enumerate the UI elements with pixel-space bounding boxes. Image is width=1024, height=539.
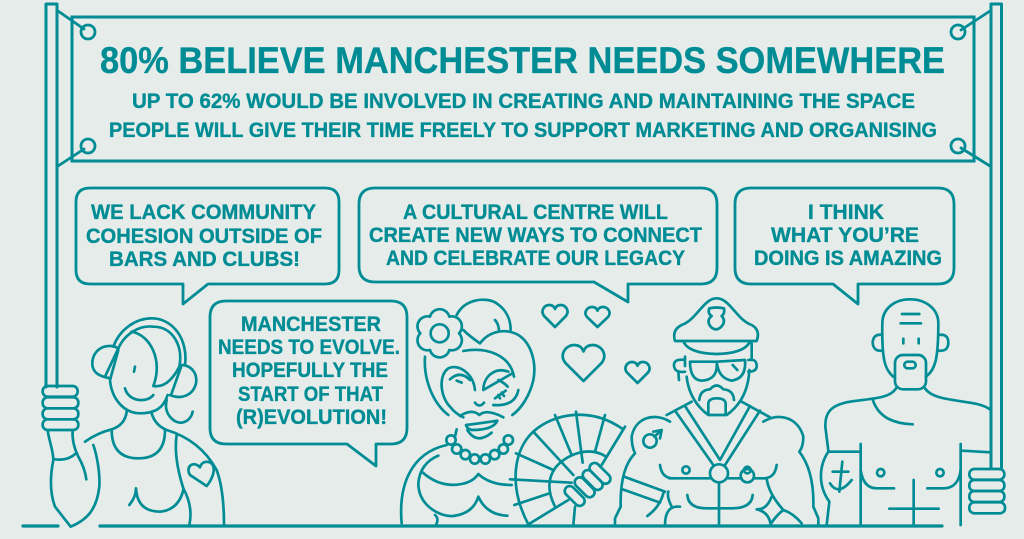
speech bubble: amazing: I THINK [808, 201, 884, 224]
speech bubble: evolve: START OF THAT [238, 383, 383, 406]
speech bubble: evolve: HOPEFULLY THE [232, 359, 388, 382]
left banner pole [46, 4, 57, 387]
banner line one: UP TO 62% WOULD BE INVOLVED IN CREATING AND MAINTAINING THE SPACE [132, 90, 915, 113]
right banner pole [991, 4, 1002, 468]
icon: floating hearts [542, 305, 650, 383]
speech bubble: cultural centre: CREATE NEW WAYS TO CONNECT [369, 224, 702, 247]
speech bubble: cultural centre [359, 188, 717, 302]
speech bubble: amazing: DOING IS AMAZING [754, 247, 942, 270]
speech bubble: evolve: NEEDS TO EVOLVE. [218, 336, 400, 359]
speech bubble: evolve: MANCHESTER [241, 313, 381, 336]
speech bubble: evolve [210, 301, 407, 466]
ground line [23, 524, 942, 528]
fan [510, 412, 625, 525]
banner fixings [58, 11, 990, 166]
banner [58, 11, 990, 166]
speech bubble: community cohesion: COHESION OUTSIDE OF [86, 225, 322, 248]
speech bubble: cultural centre: AND CELEBRATE OUR LEGACY [386, 247, 685, 270]
figure: drag queen with fan [401, 300, 625, 525]
banner frame [72, 17, 974, 161]
icon: anchor tattoo [830, 462, 852, 492]
banner line two: PEOPLE WILL GIVE THEIR TIME FREELY TO SUPPORT MARKETING AND ORGANISING [109, 119, 937, 142]
speech bubble: cultural centre: A CULTURAL CENTRE WILL [403, 201, 668, 224]
speech bubble: evolve: (R)EVOLUTION! [236, 406, 387, 429]
figure: woman with headphones [43, 318, 224, 527]
banner headline: 80% BELIEVE MANCHESTER NEEDS SOMEWHERE [100, 40, 945, 81]
figure: leather cap man [615, 298, 818, 525]
figure: bald man with anchor tattoo [821, 299, 1005, 525]
speech bubble: community cohesion: BARS AND CLUBS! [109, 248, 300, 271]
speech bubble: amazing [735, 188, 954, 304]
speech bubble: community cohesion [76, 188, 339, 304]
icon: male symbol tattoo [643, 430, 662, 448]
speech bubble: amazing: WHAT YOU’RE [771, 224, 919, 247]
speech bubble: community cohesion: WE LACK COMMUNITY [91, 201, 316, 224]
